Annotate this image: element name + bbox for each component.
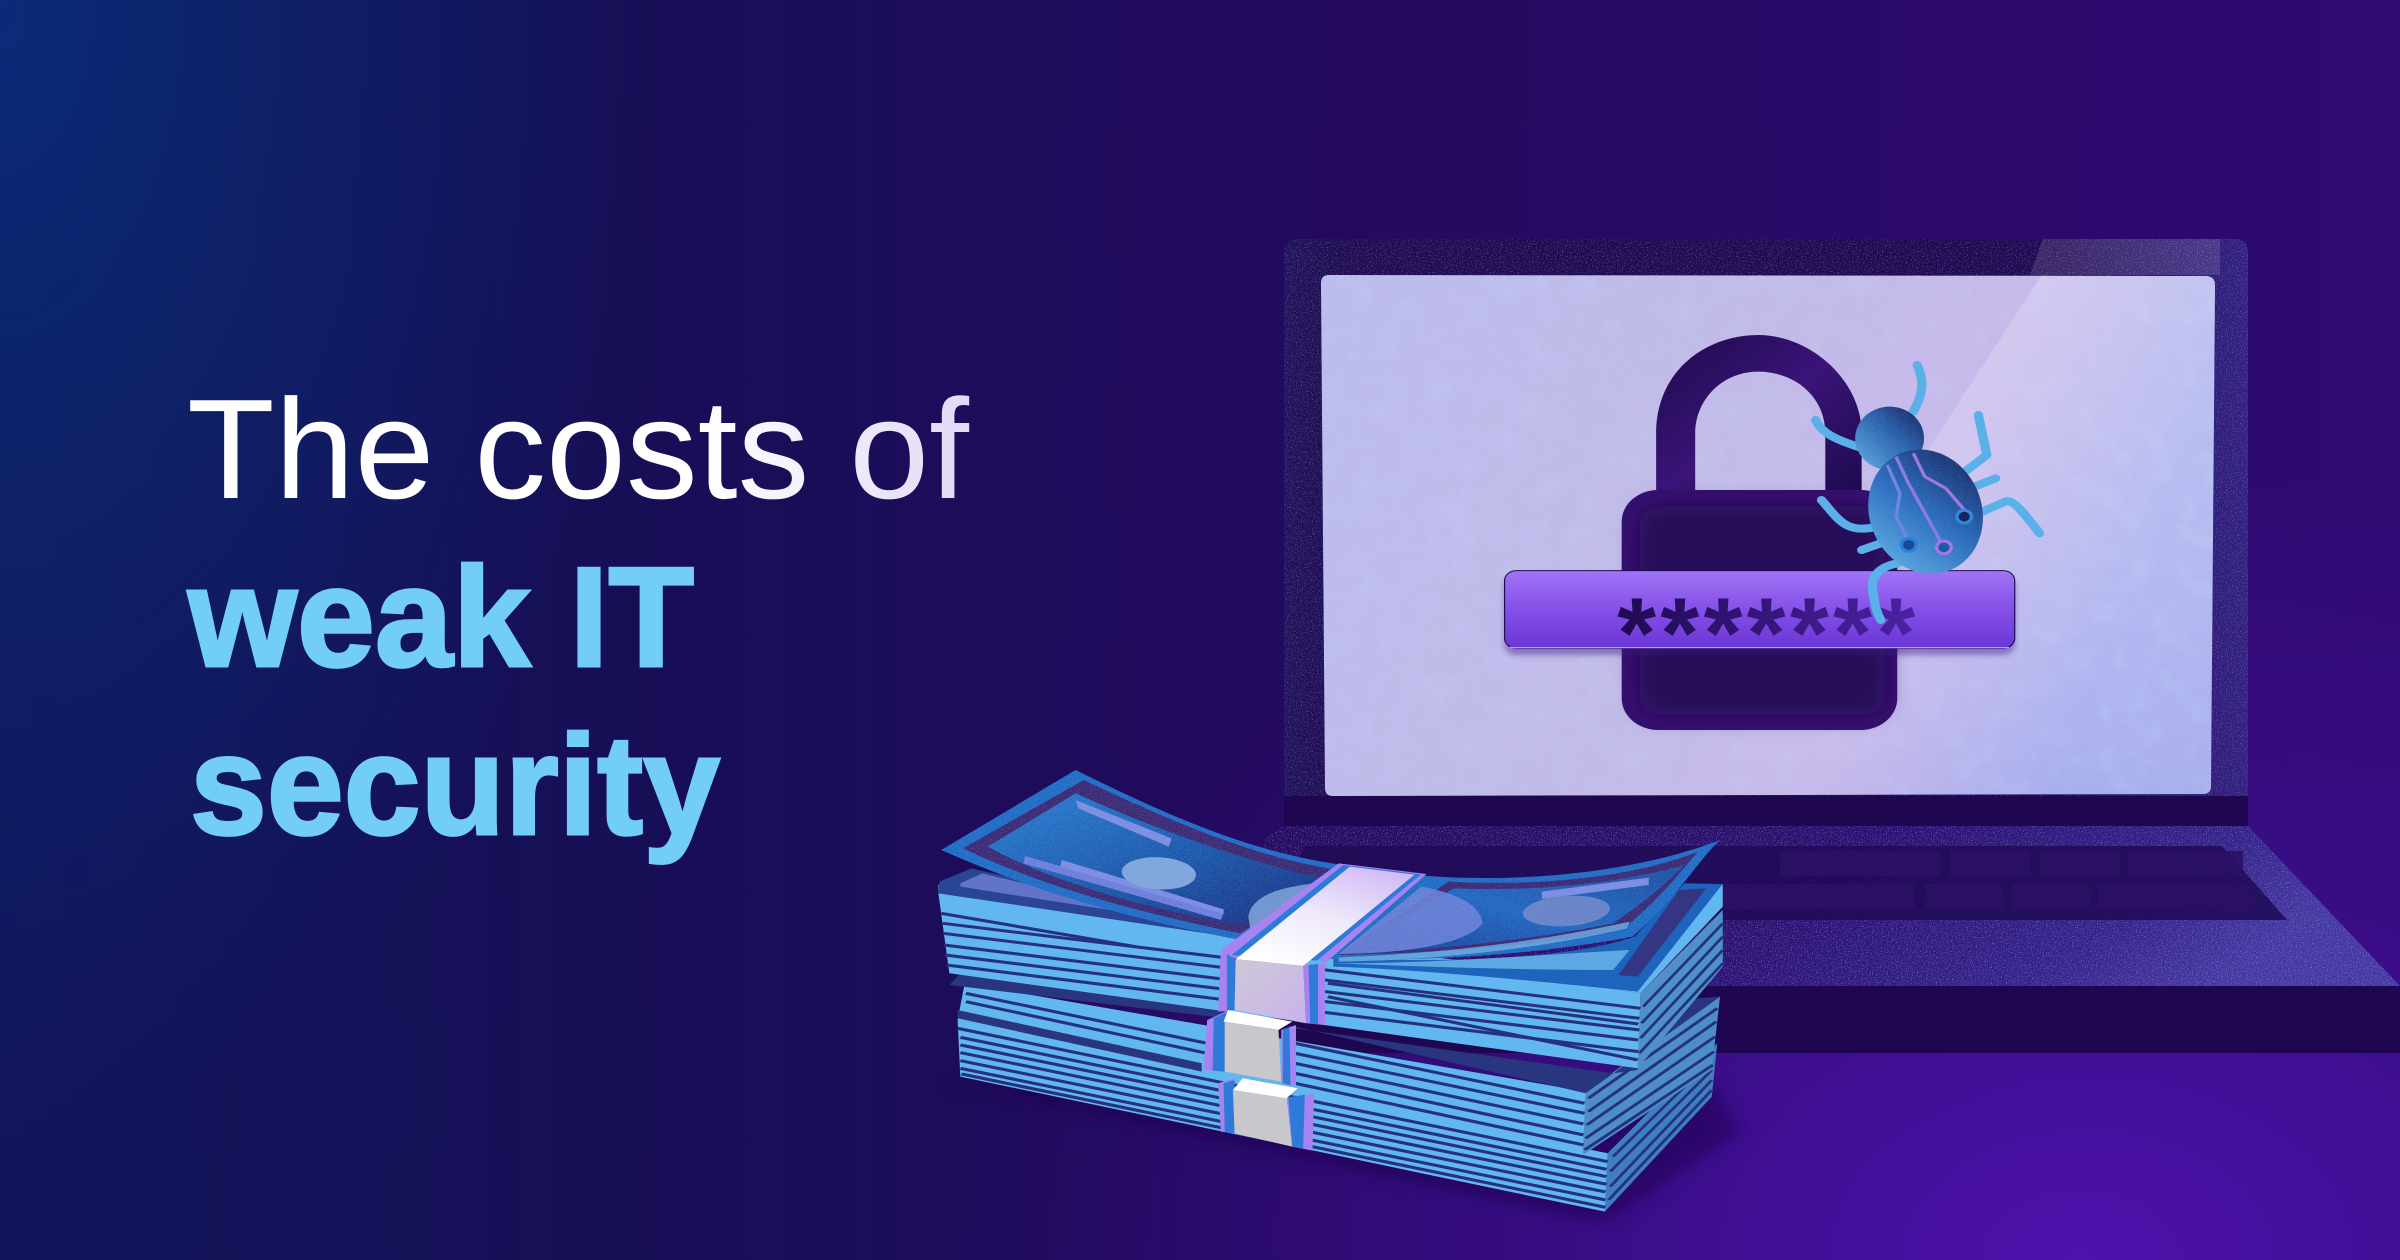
banknote strips and seals <box>1076 800 1172 847</box>
band middle front <box>1203 1010 1296 1087</box>
icon: password field <box>1505 571 2015 690</box>
band upper front <box>1218 950 1325 1025</box>
middle banknote bundle <box>949 973 1720 1155</box>
title line: The costs of: The costs of <box>187 370 970 529</box>
title line: weak IT: weak IT <box>187 538 694 697</box>
laptop screen <box>1321 270 2220 800</box>
stack shadow <box>949 1083 1739 1223</box>
band wrap top <box>1221 863 1427 966</box>
top banknote bundle <box>938 868 1723 1068</box>
band lower front <box>1218 1078 1314 1151</box>
laptop illustration <box>1220 233 2400 1053</box>
icon: bug <box>1816 365 2040 620</box>
padlock and bug icon <box>1505 335 2040 730</box>
laptop lid bezel <box>1284 233 2248 826</box>
bug body <box>1855 440 1996 583</box>
keyboard keys <box>1260 846 2287 920</box>
screen glare <box>1898 276 2215 636</box>
title <box>187 370 970 865</box>
bug circuit traces <box>1887 453 1971 554</box>
right lower banknote <box>1333 883 1723 992</box>
laptop front edge <box>1220 986 2400 1053</box>
title line: security: security <box>190 706 720 865</box>
bug head <box>1855 407 1924 470</box>
bug legs <box>1816 365 2040 620</box>
password asterisks: ******* <box>1617 579 1920 690</box>
paper band <box>1203 863 1427 1151</box>
top curved banknote <box>938 768 1723 962</box>
laptop keyboard deck <box>1220 826 2400 986</box>
bottom banknote bundle <box>958 1020 1717 1212</box>
money stack illustration <box>938 768 1739 1223</box>
icon: padlock <box>1622 335 1897 730</box>
